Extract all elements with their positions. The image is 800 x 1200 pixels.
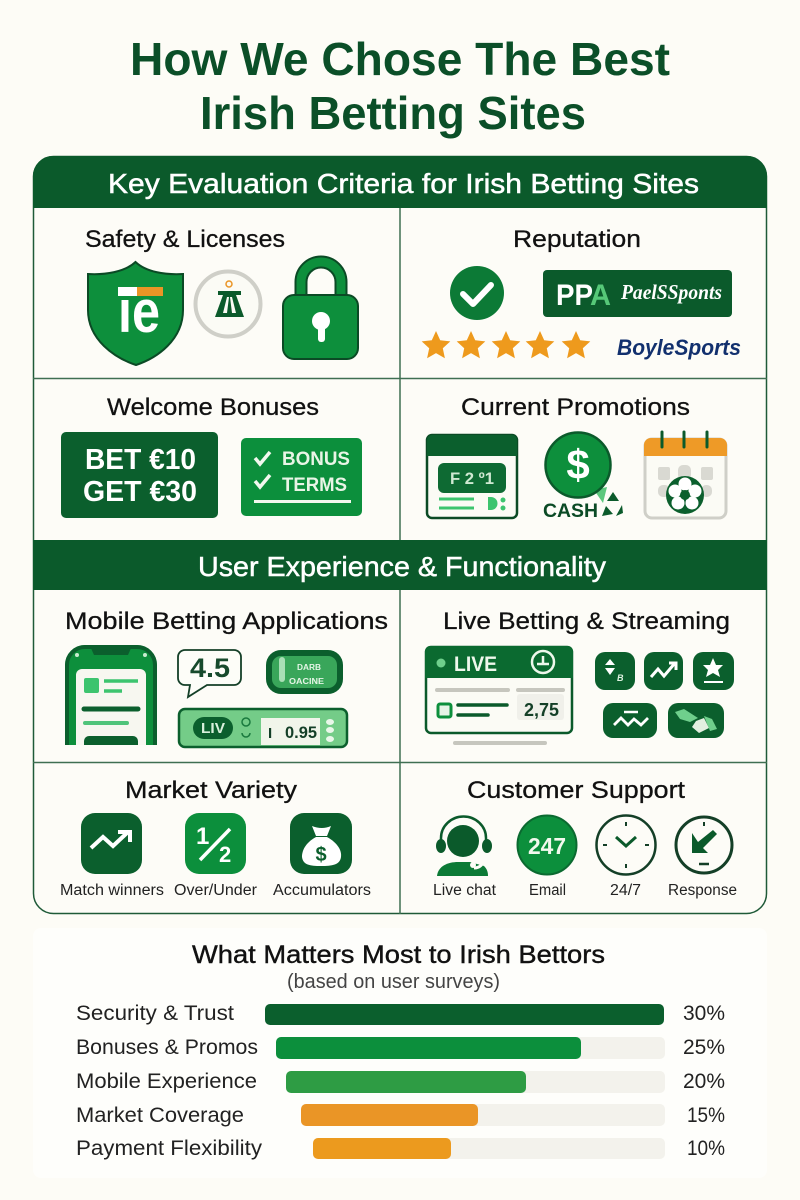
icon: padlock: [283, 262, 358, 359]
icon: cash coin: [543, 432, 623, 522]
icon: five stars: [422, 331, 590, 358]
icon: 24/7 clock: [596, 816, 656, 899]
icon: match winners: Match winners: [60, 882, 164, 899]
icon: promo browser window: [427, 435, 517, 518]
icon: live chat headset: Live chat: [433, 882, 497, 899]
panel: mobile betting applications: [65, 608, 388, 747]
heading: reputation: Reputation: [513, 226, 641, 253]
heading: safety: Safety & Licenses: [85, 226, 285, 253]
panel: current promotions: [427, 394, 727, 522]
bar: market coverage 15%: 15%: [687, 1104, 725, 1127]
panel: welcome bonuses: [61, 394, 362, 518]
panel: safety and licenses: [85, 226, 358, 365]
bar: security and trust 30%: [76, 1002, 725, 1025]
panel: market variety: [60, 777, 371, 899]
badge: app store: [266, 650, 343, 694]
bar: bonuses and promos 25%: Bonuses & Promos: [76, 1036, 258, 1059]
bar: bonuses and promos 25%: 25%: [683, 1036, 725, 1059]
badge: bonus terms: TERMS: [282, 475, 347, 496]
badge: PPA logos: PP: [556, 279, 593, 312]
bar: security and trust 30%: Security & Trust: [76, 1002, 234, 1025]
icon: live betting window: 2,75: [524, 700, 559, 720]
badge: bonus terms: [241, 438, 362, 516]
title: Irish Betting Sites: [200, 87, 586, 139]
icon: live chat headset: [433, 817, 497, 899]
badge: bet 10 get 30: BET €10: [85, 444, 196, 476]
bar: bonuses and promos 25%: [76, 1036, 725, 1059]
heading: customer support: Customer Support: [467, 777, 685, 804]
panel: live betting and streaming: [425, 608, 734, 745]
badge: app store: DARB: [297, 663, 321, 672]
logo: BoyleSports: BoyleSports: [617, 335, 741, 360]
heading: mobile betting: Mobile Betting Applications: [65, 608, 388, 635]
icon: regulator seal: [196, 272, 260, 336]
icon: ie shield: ie: [118, 278, 160, 345]
heading: market variety: Market Variety: [125, 777, 298, 804]
heading: current promotions: Current Promotions: [461, 394, 690, 421]
icon: email 247: Email: [529, 882, 566, 899]
icon: over under: 2: [219, 842, 231, 867]
heading: key evaluation criteria: Key Evaluation Criteria for Irish Betting Sites: [108, 168, 699, 199]
icon: football calendar: [644, 432, 727, 518]
badge: bet 10 get 30: GET €30: [83, 476, 197, 508]
icon: accumulators: $: [315, 844, 327, 866]
panel: customer support: [433, 777, 737, 899]
icon: match winners: [60, 813, 164, 899]
heading: welcome bonuses: Welcome Bonuses: [107, 394, 319, 421]
icon: accumulators: Accumulators: [273, 882, 371, 899]
icon: over under: 1: [196, 823, 209, 850]
icon: promo browser window: F 2 º1: [450, 469, 494, 488]
title: [130, 33, 670, 139]
icon: 24/7 clock: 24/7: [610, 882, 641, 899]
icon: live betting window: [425, 646, 573, 745]
badge: live odds bar: LIV: [201, 720, 225, 737]
bar: mobile experience 20%: [76, 1070, 725, 1093]
bar: mobile experience 20%: Mobile Experience: [76, 1070, 257, 1093]
badge: PPA logos: [543, 270, 732, 317]
icon: over under: Over/Under: [174, 882, 257, 899]
icon: live betting window: LIVE: [454, 653, 497, 676]
bar: market coverage 15%: [76, 1104, 725, 1127]
heading: chart title: What Matters Most to Irish Bettors: [192, 941, 605, 969]
badge: PPA logos: A: [590, 279, 611, 312]
badge: PPA logos: PaelSSponts: [620, 280, 722, 304]
icon group: betting features: [595, 652, 734, 738]
icon: email 247: [518, 816, 576, 899]
badge: bonus terms: BONUS: [282, 449, 350, 470]
icon: response dial: [668, 817, 737, 899]
heading: live betting: Live Betting & Streaming: [443, 608, 730, 635]
icon: phone: [65, 645, 157, 745]
badge: app store: OACINE: [289, 677, 325, 686]
panel: evaluation criteria frame: [33, 156, 767, 914]
bar: payment flexibility 10%: Payment Flexibility: [76, 1137, 263, 1160]
bar: payment flexibility 10%: [76, 1137, 725, 1160]
icon: cash coin: CASH: [543, 501, 598, 522]
icon: over under: [174, 813, 257, 899]
panel: what matters most chart: [33, 928, 767, 1178]
title: How We Chose The Best: [130, 33, 670, 85]
badge: live odds bar: 0.95: [285, 724, 317, 742]
icon: response dial: Response: [668, 882, 737, 899]
badge: live odds bar: [179, 709, 347, 747]
icon: rating bubble: 4.5: [190, 653, 230, 683]
heading: user experience: User Experience & Functionality: [198, 551, 606, 582]
icon group: betting features: B: [617, 673, 624, 683]
bar: market coverage 15%: Market Coverage: [76, 1104, 244, 1127]
icon: rating bubble: [178, 650, 241, 697]
icon: email 247: 247: [528, 833, 566, 859]
bar: payment flexibility 10%: 10%: [687, 1137, 725, 1160]
badge: bet 10 get 30: [61, 432, 218, 518]
panel: reputation: [422, 226, 741, 360]
icon: accumulators: [273, 813, 371, 899]
icon: cash coin: $: [566, 441, 590, 488]
bar: mobile experience 20%: 20%: [683, 1070, 725, 1093]
badge: live odds bar: I: [268, 725, 272, 742]
bar: security and trust 30%: 30%: [683, 1002, 725, 1025]
icon: ie shield: [88, 262, 183, 365]
chart subtitle: (based on user surveys): [287, 971, 500, 993]
icon: check badge: [450, 266, 504, 320]
